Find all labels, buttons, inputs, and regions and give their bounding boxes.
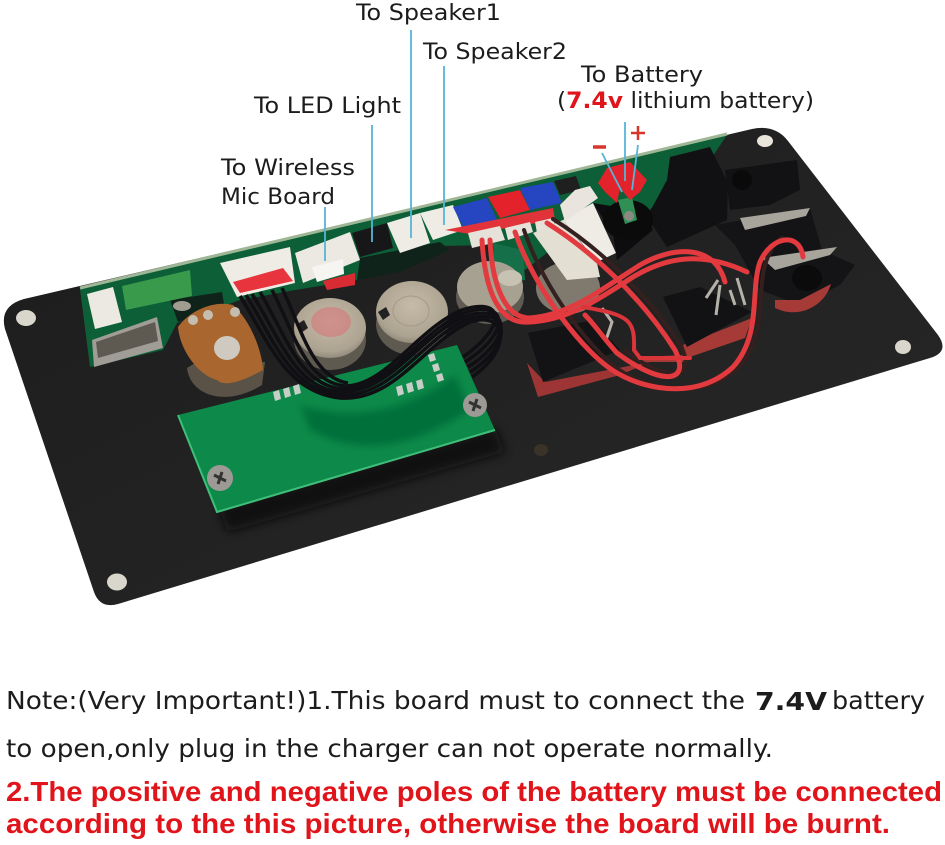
label: to speaker 2: To Speaker2 bbox=[422, 40, 567, 65]
crystal bbox=[173, 301, 191, 311]
pot 2 bbox=[376, 281, 448, 355]
solder pads bbox=[273, 353, 444, 401]
red band bbox=[445, 208, 555, 234]
plate centre dimple bbox=[534, 444, 548, 456]
pointer: battery positive bbox=[632, 145, 638, 190]
note text: battery bbox=[832, 686, 925, 715]
pointer lines bbox=[325, 30, 638, 261]
plate hole: bottom bbox=[107, 574, 127, 590]
red warning text: 2.The positive and negative poles of the battery must be connected bbox=[6, 776, 942, 807]
plate hole: left bbox=[16, 310, 36, 326]
pointer: wireless mic bbox=[324, 207, 326, 261]
plate hole: top bbox=[757, 135, 773, 147]
silver contact on left switch bbox=[602, 308, 612, 340]
dark wire pair 2 bbox=[553, 219, 685, 373]
blue connector 2 bbox=[520, 182, 562, 210]
pointer: battery negative bbox=[602, 153, 622, 192]
red connector bbox=[488, 190, 530, 218]
red wire 1 bbox=[482, 240, 747, 322]
screw left bbox=[207, 465, 233, 491]
connector: speaker 2 bbox=[420, 205, 463, 240]
cream capacitor bbox=[533, 220, 600, 280]
label: to speaker 1: To Speaker1 bbox=[355, 1, 501, 26]
pointer: LED bbox=[371, 125, 373, 242]
screw right bbox=[463, 393, 487, 417]
right jack with silver tabs bbox=[715, 170, 855, 305]
label: to LED light: To LED Light bbox=[253, 94, 401, 119]
note text: to open,only plug in the charger can not operate normally. bbox=[6, 734, 773, 763]
connector plug bbox=[312, 259, 344, 282]
centre switch bbox=[663, 278, 752, 347]
pointer: speaker 1 bbox=[410, 30, 412, 238]
red warning text bbox=[6, 776, 942, 839]
connector: speaker 1 bbox=[387, 213, 430, 253]
dark wire pair bbox=[524, 230, 782, 389]
potentiometers bbox=[178, 186, 616, 397]
top right jack bbox=[725, 160, 800, 210]
battery connector bbox=[598, 162, 653, 240]
small green module board bbox=[178, 345, 495, 512]
cable tie bbox=[560, 186, 598, 222]
black ribbon wires bbox=[240, 288, 501, 398]
label: to wireless mic board bbox=[220, 156, 355, 210]
plus sign bbox=[631, 126, 645, 140]
connector red plug bbox=[323, 273, 355, 290]
connectors strip bbox=[220, 176, 581, 297]
red wire 2 bbox=[490, 240, 725, 318]
red glue at right bbox=[775, 284, 831, 312]
note text: 7.4V bbox=[755, 687, 828, 716]
pot 4 with white capacitor bbox=[533, 186, 616, 314]
connector: mic board ribbon bbox=[220, 247, 295, 297]
red mark on connector bbox=[233, 268, 293, 293]
white tabs bbox=[468, 218, 556, 248]
relay block bbox=[647, 147, 728, 247]
pointer: battery bbox=[624, 122, 626, 181]
shaded area on module bbox=[300, 375, 470, 446]
connector: wireless mic bbox=[295, 232, 360, 283]
label: lithium battery: (7.4v lithium battery) bbox=[557, 89, 814, 114]
red wire 3 bbox=[515, 232, 803, 389]
shadow under green module bbox=[218, 428, 505, 532]
battery terminal block bbox=[593, 203, 653, 260]
dark component clutter bbox=[170, 242, 450, 322]
label: to wireless mic board: To Wireless bbox=[220, 156, 355, 181]
white sticker bbox=[563, 203, 616, 262]
brown potentiometer bbox=[178, 304, 265, 397]
black mounting plate bbox=[4, 128, 943, 605]
plate hole: right bbox=[895, 340, 911, 354]
black switches and jacks bbox=[527, 147, 855, 397]
antenna trace bbox=[122, 270, 192, 310]
note text: Note:(Very Important!)1.This board must to connect the bbox=[6, 686, 745, 715]
label: to battery: To Battery bbox=[580, 63, 703, 88]
centre switch glue bbox=[640, 318, 752, 362]
minus sign bbox=[593, 145, 606, 149]
pot 3 bbox=[456, 243, 525, 324]
red wire 5 bbox=[583, 307, 690, 358]
board top edge bbox=[80, 134, 727, 288]
left switch glue bbox=[527, 362, 650, 397]
note text bbox=[6, 686, 925, 763]
blue connector 1 bbox=[453, 198, 497, 227]
red and black power wires bbox=[482, 219, 803, 389]
SD card slot bbox=[92, 317, 163, 367]
green circuit board bbox=[80, 134, 727, 367]
red wire 4 bbox=[547, 223, 680, 377]
pot 1 bbox=[294, 298, 366, 370]
red warning text: according to the this picture, otherwise the board will be burnt. bbox=[6, 808, 890, 839]
pointer: speaker 2 bbox=[443, 66, 445, 225]
black LED connector bbox=[352, 223, 393, 257]
label: to wireless mic board: Mic Board bbox=[221, 185, 335, 210]
white connector at left bbox=[87, 287, 122, 329]
small black chip bbox=[554, 176, 581, 195]
left switch bbox=[528, 320, 620, 382]
